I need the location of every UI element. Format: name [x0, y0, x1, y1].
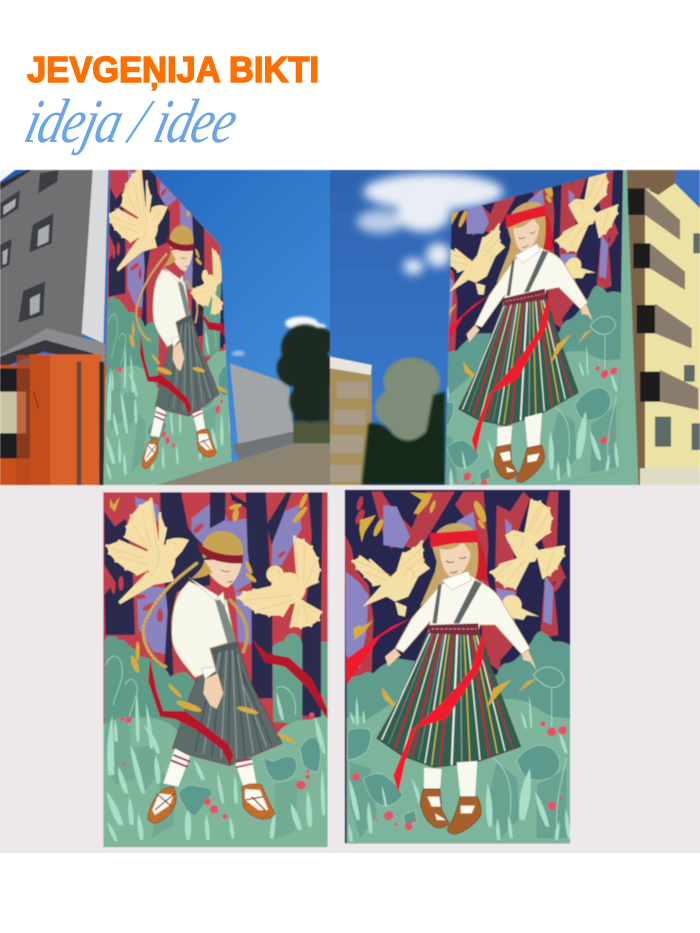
- bird left: [107, 499, 189, 604]
- light panel background behind the designs: [0, 485, 700, 853]
- photo: mural mock-up on grey building with blue sky: [0, 147, 340, 488]
- design panel: girl with beret: [103, 492, 327, 847]
- subtitle: ideja / idee: ideja / idee: [18, 88, 245, 156]
- design panel: girl with red headband and striped skirt: [345, 490, 570, 843]
- title: JEVGEŅIJA BIKTI: [27, 49, 319, 90]
- photo: mural mock-up on yellow apartment building: [330, 153, 700, 509]
